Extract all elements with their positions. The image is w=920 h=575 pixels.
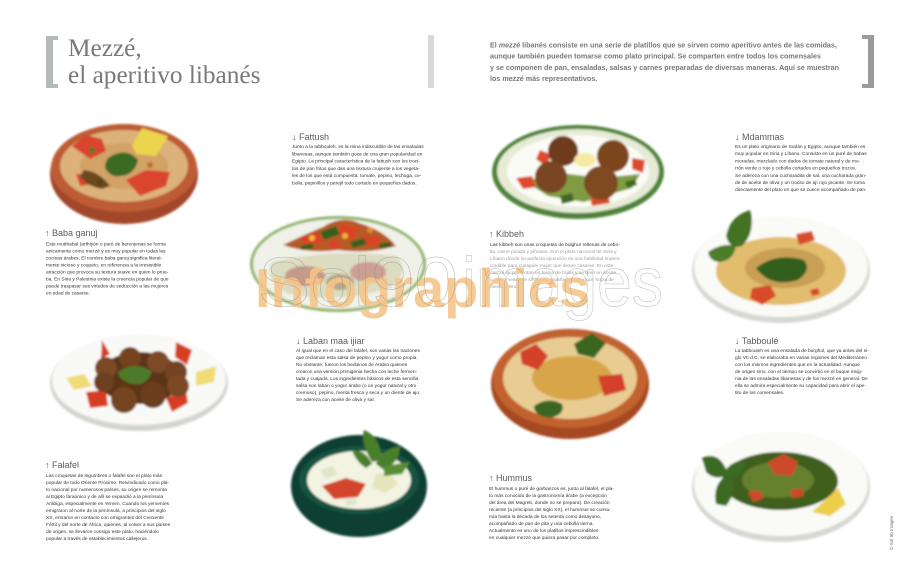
caption: mdammas: rrón verde o rojo y cebolla cortados en pequeños trozos. [735,166,856,172]
caption: fattush: libanesas, aunque también goza de una gran popularidad en [292,151,423,157]
watermark: Sol90 [258,243,458,321]
caption: kibbeh: Líbano donde su perfecta ejecución es una habilidad impres- [490,256,621,262]
caption: kibbeh: cindible para cualquier mujer que desee casarse. En este [490,263,614,269]
caption: tabboule: ↓ Tabboulé [735,336,778,346]
caption: mdammas: Se adereza con una cucharadita de sal, una cucharada gran- [735,173,867,179]
caption: falafel [45,460,171,542]
caption: tabboule: tito de los comensales. [735,390,784,396]
intro text: los mezzé más representativos. [490,75,597,83]
caption: hummus: reciente (a principios del siglo XX), el hummus se consu- [489,507,611,513]
dish: kibbeh [492,125,664,219]
caption: laban maa ijiar: Se adereza con aceite de oliva y sal. [296,397,375,403]
caption: baba ganuj: ↑ Baba ganuj [45,228,98,238]
dish: baba ganuj [50,124,198,224]
caption: hummus [489,473,614,541]
caption: falafel: Las croquetas de legumbres o falafel son el plato más [46,473,163,479]
caption: tabboule: con los mismos ingredientes que en la actualidad. Aunque [735,362,860,368]
caption: baba ganuj: atracción que provoca su textura suave en quien lo prue- [46,270,169,276]
caption: laban maa ijiar [296,336,420,403]
dish: hummus [491,329,649,439]
caption: fattush: ↓ Fattush [292,132,329,142]
dish: falafel [50,335,228,431]
caption: hummus: del área del Magreb, donde no se prepara). De creación [489,500,610,506]
dish: mdammas [692,210,870,323]
caption: kibbeh [489,229,621,290]
caption: tabboule: glo VII d.C. se elaboraba en varias regiones del Mediterráneo [735,355,867,361]
caption: fattush: bolla, pepinillos y perejil todo cortado en pequeños dados. [292,180,417,186]
caption: tabboule: de origen sirio, con el tiempo se convirtió en el buque insig- [735,369,863,375]
dish: tabboule [692,432,870,542]
caption: mdammas: directamente del plato en que se cuece acompañado de pan. [735,187,866,193]
caption: fattush [292,132,424,186]
caption: laban maa ijiar: ↓ Laban maa ijiar [296,336,365,346]
intro text: y se componen de pan, ensaladas, salsas y carnes preparadas de diversas maneras. Aquí se muestran [490,64,839,72]
intro text: aunque también pueden tomarse como plato principal. Se comparten entre todos los comensales [490,52,821,60]
caption: baba ganuj: cocinas árabes. El nombre baba ganuj significa literal- [46,256,162,262]
dish: fattush [250,216,426,312]
caption: hummus: en cualquier mezzé que quiera pasar por completo. [489,535,599,541]
caption: tabboule [735,336,869,396]
watermark: images [462,243,663,321]
caption: kibbeh: ↑ Kibbeh [489,229,524,239]
intro text: El mezzé libanés consiste en una serie de platillos que se sirven como aperitivo antes de las comidas, [490,42,837,50]
caption: hummus: mía hasta la década de los setenta como desayuno, [489,514,601,520]
photo credit: © Sol 90 Images [888,515,894,550]
caption: mdammas: moradas, mezclado con dados de tomate natural y de mo- [735,158,861,164]
caption: laban maa ijiar: tada y cuajada. Los ingredientes básicos de esta sencilla [296,376,419,382]
caption: mdammas: de de aceite de oliva y un trocito de ají rojo picante. Se toma [735,180,865,186]
caption: tabboule: ella se admira especialmente su capacidad para abrir el ape- [735,383,866,389]
caption: hummus: Actualmente es uno de los platillos imprescindibles [489,528,599,534]
caption: baba ganuj [45,228,169,296]
caption: baba ganuj: puede traspasar sus virtudes de seducción a las mujeres [46,284,169,290]
caption: fattush: Junto a la tabbouleh, es la reina indiscutible de las ensaladas [292,144,424,150]
caption: laban maa ijiar: salsa son laban o yogur árabe (o un yogur natural y otro [296,383,417,389]
caption: falafel: de origen, se llevaron consigo este plato, haciéndolo [46,529,159,535]
caption: laban maa ijiar: Al igual que en el caso del falafel, son varias las naciones [296,348,420,354]
title: el aperitivo libanés [68,61,260,89]
caption: mdammas: muy popular en Siria y Líbano. Consiste en un puré de habas [735,151,867,157]
caption: falafel: to nacional por numerosos países, su origen se remonta [46,487,167,493]
left bracket [46,36,58,88]
caption: laban maa ijiar: que reclaman esta salsa de pepino y yogur como propia. [296,355,418,361]
divider bar [428,35,434,88]
caption: kibbeh: menta y limón. [490,284,522,290]
caption: falafel: Arábiga, especialmente en Yemen. Cuando los yemeníes [46,501,170,507]
caption: baba ganuj: en edad de casarse. [46,290,90,296]
caption: falafel: emigraron al norte de la península, a principios del siglo [46,508,166,514]
caption: falafel: ↑ Falafel [45,460,79,470]
caption: tabboule: La tabbouleh es una ensalada de burghul, que ya antes del si- [735,348,869,354]
caption: kibbeh: o se hornean. Se sirven acompañadas de yogur, hojas de [490,277,614,283]
caption: kibbeh: lla, carne picada y piñones. Son el plato nacional de Siria y [490,249,617,255]
watermark: Infographics [255,257,590,319]
caption: falafel: al Egipto faraónico y de allí se expandió a la península [46,494,163,500]
caption: mdammas: ↓ Mdammas [735,132,785,142]
caption: kibbeh: Las kibbeh son unas croquetas de bulghur rellenas de cebo- [490,242,620,248]
caption: laban maa ijiar: No obstante, fueron los beduinos de Arabia quienes [296,362,408,368]
caption: falafel: popular a través de establecimientos callejeros. [46,536,148,542]
caption: baba ganuj: mente vicioso y coqueto, en referencia a la irresistible [46,262,162,268]
dish: laban maa ijiar [291,430,427,537]
caption: mdammas [735,132,867,193]
caption: hummus: El hummus o puré de garbanzos es, junto al falafel, el pla- [489,486,614,492]
caption: falafel: XX, entraron en contacto con emigrantes del Creciente [46,515,164,521]
caption: baba ganuj: Este mutthabal (arthiyón o puré de berenjenas se forma [46,242,166,248]
caption: baba ganuj: ba. En Siria y Palestina existe la creencia popular de que [46,276,169,282]
caption: fattush: les de los que está compuesta: tomate, pepino, lechuga, ce- [292,173,422,179]
caption: laban maa ijiar: cremoso), pepino, menta fresca y seca y un diente de ajo. [296,390,420,396]
caption: falafel: Fértil y del norte de África, quienes, al volver a sus países [46,521,171,528]
caption: laban maa ijiar: crearon una versión primigenia hecha con leche fermen- [296,369,418,375]
caption: mdammas: Es un plato originario de Sudán y Egipto, aunque también es [735,144,866,150]
title: Mezzé, [68,34,142,62]
right bracket [862,35,874,88]
caption: kibbeh: mezzé se presentan en forma de bolas y se fríen en aceite [490,270,616,276]
caption: hummus: acompañado de pan de pita y una cebolla tierna. [489,521,594,527]
caption: fattush: tos de pan fritos que dan una textura crujiente a los vegeta- [292,166,420,172]
caption: baba ganuj: anicamente como mezzé y es muy popular en todas las [46,248,166,254]
caption: tabboule: nia de las ensaladas libanesas y de los mezzé en general. De [735,376,868,382]
caption: fattush: Egipto. La principal característica de la fattush son los troci- [292,159,420,165]
caption: hummus: to más conocido de la gastronomía árabe (a excepción [489,493,607,499]
caption: hummus: ↑ Hummus [489,473,533,483]
title block [46,34,260,89]
watermark [255,243,663,321]
caption: falafel: popular de todo Oriente Próximo. Reivindicado como pla- [46,480,169,486]
